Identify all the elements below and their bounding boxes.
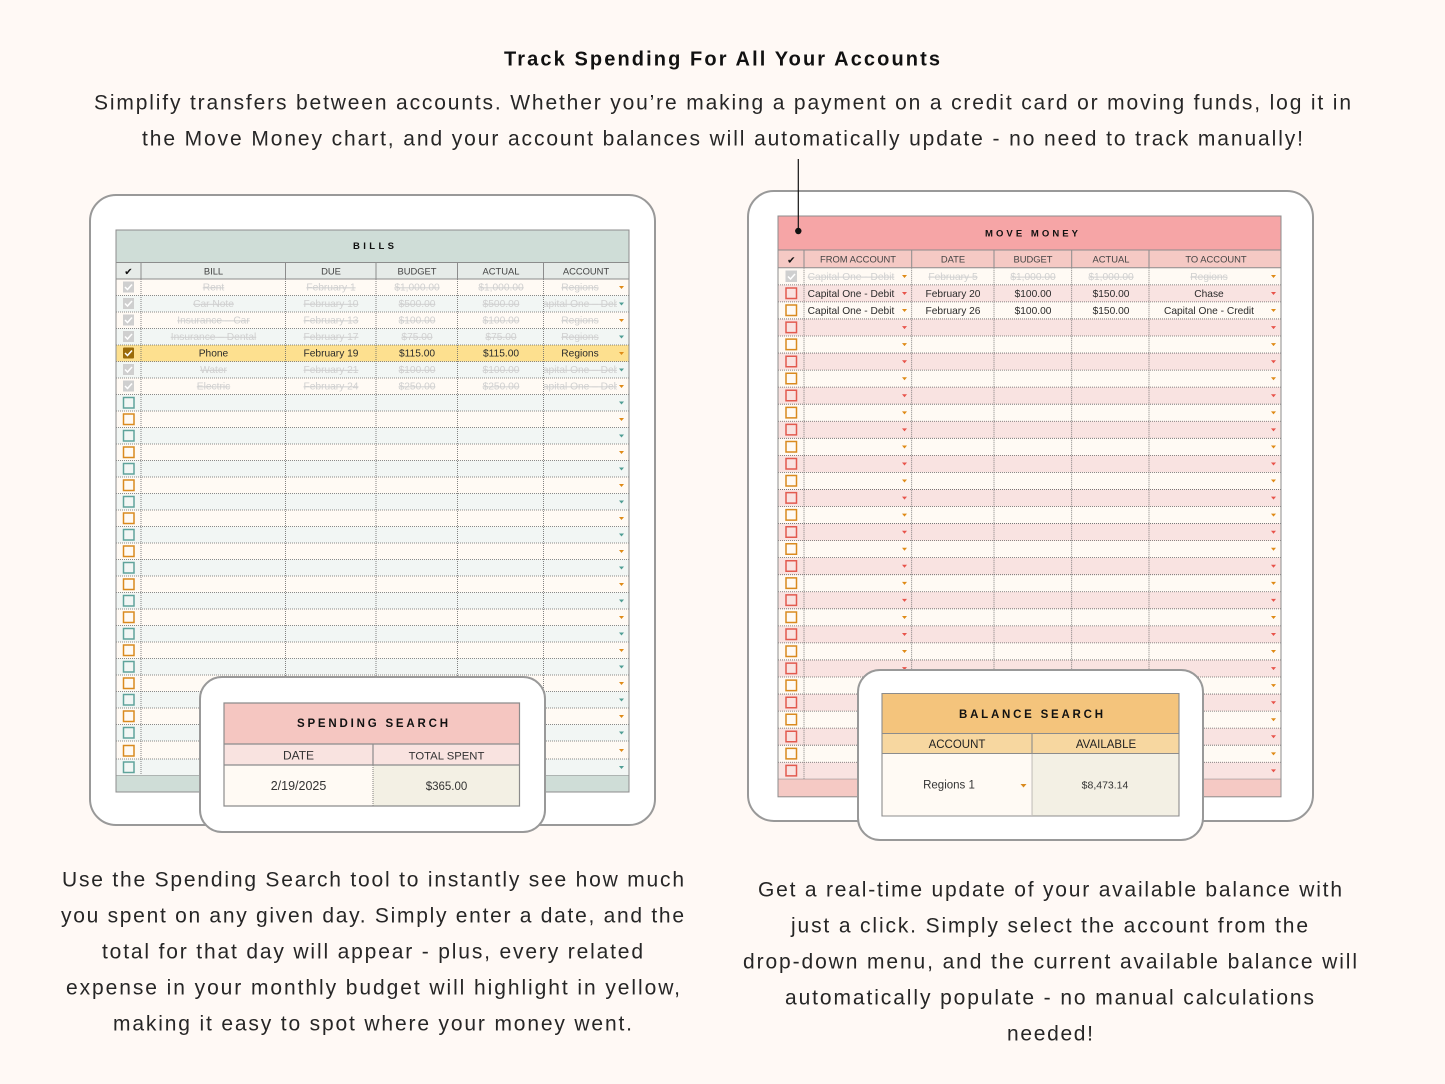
bills table rows: $100.00 — [483, 365, 520, 376]
move money dropdown arrows — [902, 275, 1276, 772]
move money rows: February 5 — [928, 272, 978, 283]
bills dropdown arrows — [619, 286, 624, 769]
intro text — [94, 91, 1351, 150]
text block: spending search description: Use the Spending Search tool to instantly see how much — [62, 868, 684, 891]
move money rows — [808, 272, 1254, 317]
panel: move money tablet — [748, 191, 1313, 821]
bills table rows: February 1 — [306, 282, 356, 294]
spending search values — [224, 765, 520, 806]
spending search title: SPENDING SEARCH — [297, 718, 448, 730]
panel: bills tablet — [90, 195, 655, 825]
text block: spending search description — [61, 868, 684, 1035]
bills table rows: Insurance – Car — [177, 316, 250, 326]
bills table rows: $250.00 — [483, 382, 520, 392]
spending search values: 2/19/2025 — [271, 779, 326, 793]
bills table rows: February 24 — [304, 382, 359, 392]
move money rows: Capital One - Credit — [1164, 306, 1254, 317]
intro text: the Move Money chart, and your account balances will automatically update - no need to track manually! — [142, 127, 1303, 150]
spending search title — [224, 703, 520, 744]
move money header: BUDGET — [1013, 254, 1053, 264]
move money rows: Capital One - Debit — [808, 272, 894, 283]
move money rows: Regions — [1190, 272, 1228, 283]
bills table rows: $100.00 — [483, 316, 520, 326]
spending search header — [224, 744, 520, 765]
panel: spending search card — [200, 677, 545, 832]
bills table header: ✔ — [124, 267, 133, 278]
move money header: FROM ACCOUNT — [820, 254, 896, 264]
bills table rows: Regions — [561, 316, 599, 326]
text block: spending search description: making it easy to spot where your money went. — [113, 1012, 632, 1035]
bills table rows: Regions — [561, 332, 599, 343]
bills table rows: $115.00 — [399, 348, 435, 360]
move money header: TO ACCOUNT — [1185, 254, 1247, 264]
move money rows: $100.00 — [1015, 289, 1052, 300]
text block: balance search description: automatically populate - no manual calculations — [785, 986, 1314, 1009]
move money checkboxes — [786, 270, 797, 776]
spending search header: TOTAL SPENT — [409, 750, 484, 762]
bills table rows: $75.00 — [401, 332, 433, 343]
move money header: ACTUAL — [1092, 254, 1130, 264]
bills table rows: $100.00 — [399, 365, 436, 376]
bills table rows: $1,000.00 — [478, 282, 524, 294]
balance search values: $8,473.14 — [1082, 780, 1129, 792]
bills table rows: Capital One – Debit — [536, 382, 625, 392]
bills table rows: Car Note — [193, 299, 234, 310]
bills table header: ACTUAL — [482, 265, 520, 276]
text block: balance search description: needed! — [1007, 1022, 1093, 1045]
move money rows: Capital One - Debit — [808, 289, 894, 300]
bills table rows: Insurance – Dental — [171, 332, 256, 343]
move money rows: $150.00 — [1093, 306, 1130, 317]
move money rows: February 26 — [926, 306, 981, 317]
bills table rows: Water — [200, 365, 228, 376]
move money title — [778, 216, 1281, 250]
intro text: Simplify transfers between accounts. Whether you’re making a payment on a credit card or moving funds, log it in — [94, 91, 1351, 114]
bills table rows: February 17 — [304, 332, 359, 343]
move money rows: February 20 — [926, 289, 981, 300]
move money title: MOVE MONEY — [985, 229, 1079, 240]
bills table title: BILLS — [353, 241, 394, 252]
bills table header: ACCOUNT — [563, 265, 609, 276]
balance search title — [882, 694, 1179, 734]
move money rows: $1,000.00 — [1010, 272, 1056, 283]
bills table rows: Capital One – Debit — [536, 299, 625, 310]
bills table header: BILL — [204, 265, 223, 276]
move money header: DATE — [941, 254, 965, 264]
bills table rows: $75.00 — [485, 332, 517, 343]
move money rows: $100.00 — [1015, 306, 1052, 317]
move money table — [778, 216, 1281, 797]
bills table rows: Regions — [561, 282, 599, 294]
balance search header: AVAILABLE — [1076, 739, 1136, 751]
bills table header: DUE — [321, 265, 341, 276]
bills table rows: $100.00 — [399, 316, 436, 326]
bills table rows: Capital One – Debit — [536, 365, 625, 376]
move money rows: Capital One - Debit — [808, 306, 894, 317]
bills table title — [116, 230, 629, 262]
bills checkboxes — [123, 282, 134, 772]
move money header: ✔ — [787, 256, 795, 266]
move money rows: $1,000.00 — [1088, 272, 1134, 283]
text block: balance search description: drop-down menu, and the current available balance will — [743, 950, 1357, 973]
bills table rows: Electric — [197, 382, 230, 392]
bills table rows: Rent — [203, 282, 224, 294]
balance search header — [882, 734, 1179, 754]
bills table rows: $500.00 — [483, 299, 520, 310]
bills table rows: $1,000.00 — [394, 282, 440, 294]
text block: spending search description: total for that day will appear - plus, every related — [102, 940, 643, 963]
bills table rows: $250.00 — [399, 382, 436, 392]
bills table — [116, 230, 629, 792]
text block: spending search description: you spent on any given day. Simply enter a date, and the — [61, 904, 684, 927]
bills table header — [116, 262, 629, 279]
bills table rows: February 13 — [304, 316, 359, 326]
arrow: pointer to move money chart — [795, 159, 802, 234]
bills table rows: $500.00 — [399, 299, 436, 310]
bills table rows: $115.00 — [483, 348, 519, 360]
balance search header: ACCOUNT — [929, 739, 985, 751]
text block: balance search description: just a click. Simply select the account from the — [790, 914, 1308, 937]
panel: balance search card — [858, 670, 1203, 840]
title: Track Spending For All Your Accounts — [504, 48, 940, 70]
move money rows: $150.00 — [1093, 289, 1130, 300]
bills table rows — [171, 282, 625, 392]
text block: balance search description — [743, 878, 1357, 1045]
balance search title: BALANCE SEARCH — [959, 709, 1103, 721]
move money rows: Chase — [1194, 289, 1224, 300]
bills table rows: February 10 — [304, 299, 359, 310]
balance search values: Regions 1 — [923, 780, 975, 792]
spending search values: $365.00 — [426, 781, 467, 793]
bills table header: BUDGET — [397, 265, 437, 276]
balance search values — [882, 754, 1179, 816]
bills table rows: Regions — [561, 348, 599, 360]
text block: spending search description: expense in your monthly budget will highlight in yellow, — [66, 976, 680, 999]
move money header — [778, 250, 1281, 268]
bills table rows: Phone — [199, 348, 229, 360]
spending search header: DATE — [283, 748, 314, 762]
bills table rows: February 19 — [304, 348, 359, 360]
text block: balance search description: Get a real-time update of your available balance with — [758, 878, 1342, 901]
bills table rows: February 21 — [304, 365, 359, 376]
